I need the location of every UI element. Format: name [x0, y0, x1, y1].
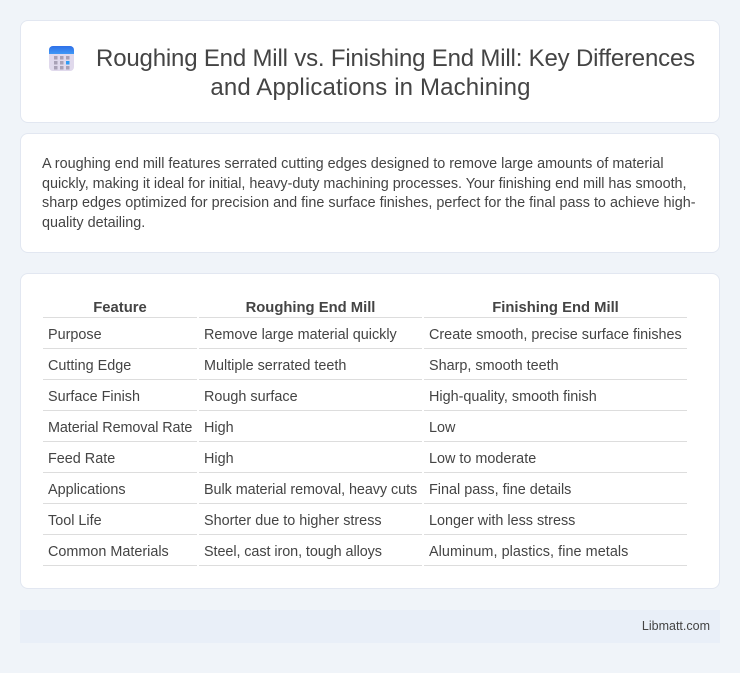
text block: introduction [42, 156, 696, 230]
table: feature comparison: Final pass, fine details [429, 482, 571, 498]
table: feature comparison: Surface Finish [48, 389, 140, 405]
panel: introduction [20, 133, 720, 253]
table: feature comparison: Steel, cast iron, tough alloys [204, 544, 382, 560]
table: feature comparison: Multiple serrated teeth [204, 358, 346, 374]
table: feature comparison: Low [429, 420, 455, 436]
table: feature comparison: Rough surface [204, 389, 298, 405]
icon: calendar [49, 46, 74, 71]
table: feature comparison: High [204, 451, 234, 467]
table: feature comparison: Roughing End Mill [246, 300, 375, 316]
table: feature comparison: Cutting Edge [48, 358, 131, 374]
table: feature comparison: Purpose [48, 327, 102, 343]
table: feature comparison: Applications [48, 482, 126, 498]
table: feature comparison: Longer with less stress [429, 513, 575, 529]
title: and Applications in Machining [210, 74, 531, 101]
table: feature comparison: Common Materials [48, 544, 169, 560]
table: feature comparison: High [204, 420, 234, 436]
footer text: Libmatt.com [642, 619, 710, 633]
text block: introduction: quickly, making it ideal for initial, heavy-duty machining processes. Your finishing end mill has smooth, [42, 176, 686, 192]
panel: comparison table [20, 273, 720, 589]
table: feature comparison: Create smooth, precise surface finishes [429, 327, 682, 343]
title [96, 45, 695, 101]
table: feature comparison: Remove large material quickly [204, 327, 397, 343]
panel: title card [20, 20, 720, 123]
table: feature comparison: Feature [93, 300, 147, 316]
text block: introduction: sharp edges optimized for precision and fine surface finishes, perfect for the final pass to achieve high- [42, 195, 696, 211]
title: Roughing End Mill vs. Finishing End Mill: Key Differences [96, 45, 695, 72]
table: feature comparison: Aluminum, plastics, fine metals [429, 544, 628, 560]
table: feature comparison [43, 300, 687, 566]
text block: introduction: quality detailing. [42, 214, 145, 230]
table: feature comparison: High-quality, smooth finish [429, 389, 597, 405]
table: feature comparison: Low to moderate [429, 451, 536, 467]
table: feature comparison: Material Removal Rate [48, 420, 192, 436]
footer bar [20, 610, 720, 643]
text block: introduction: A roughing end mill features serrated cutting edges designed to remove large amounts of material [42, 156, 664, 172]
table: feature comparison: Finishing End Mill [492, 300, 619, 316]
table: feature comparison: Tool Life [48, 513, 102, 529]
table: feature comparison: Feed Rate [48, 451, 115, 467]
table: feature comparison: Shorter due to higher stress [204, 513, 382, 529]
table: feature comparison: Sharp, smooth teeth [429, 358, 559, 374]
table: feature comparison: Bulk material removal, heavy cuts [204, 482, 417, 498]
